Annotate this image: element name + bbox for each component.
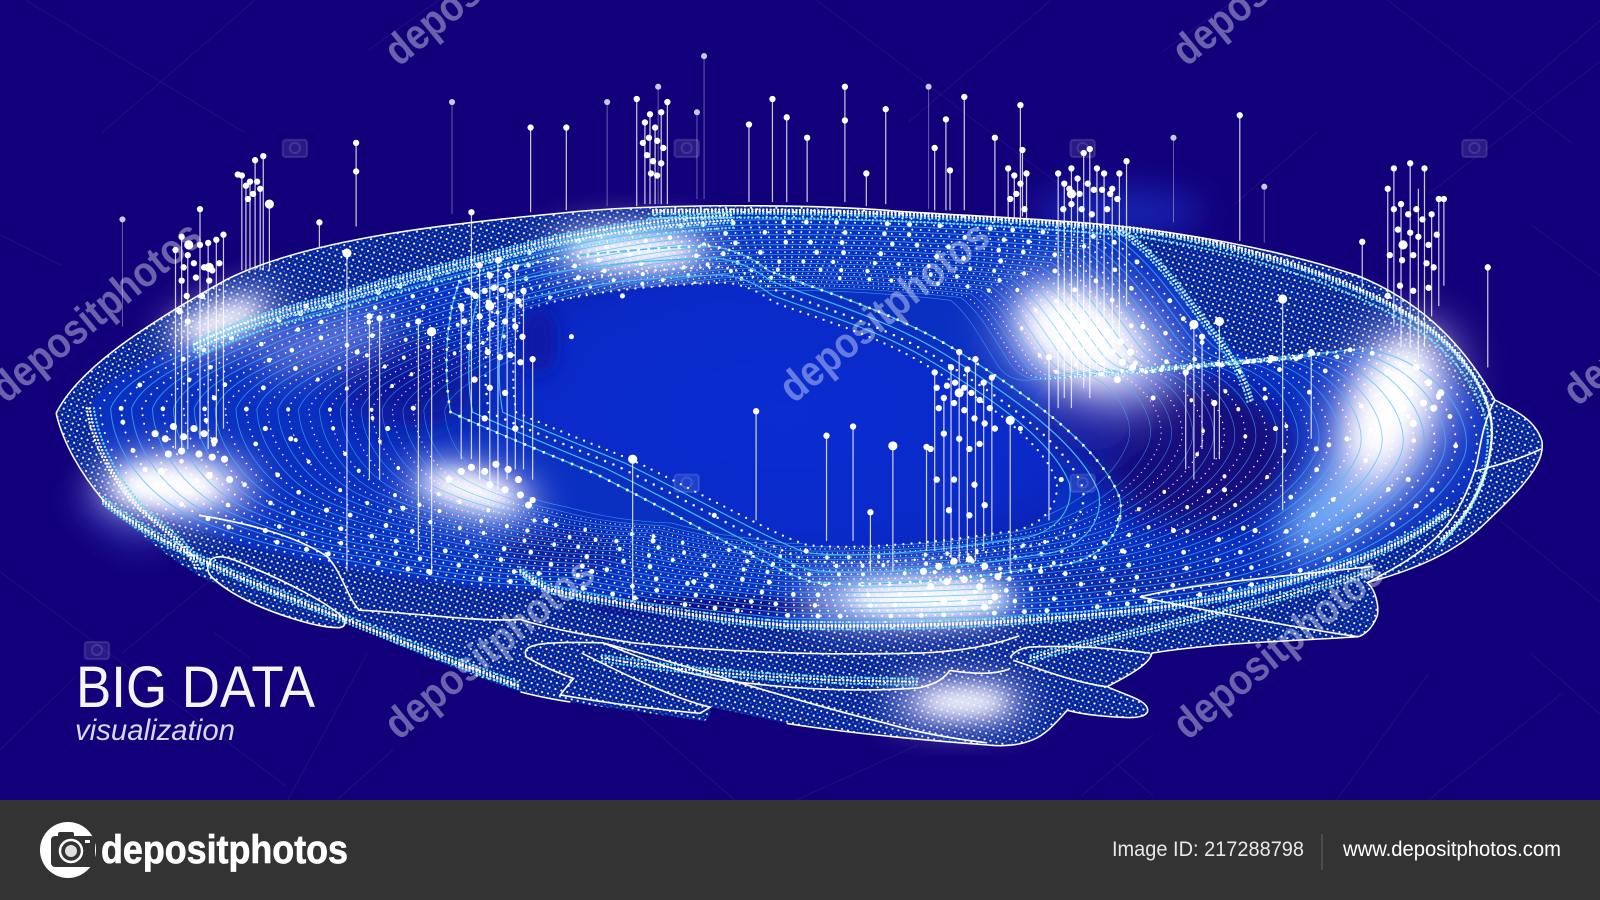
footer logo icon: camera in circle bbox=[40, 822, 96, 878]
central opening bbox=[513, 283, 1057, 547]
white outline of the silhouette bbox=[56, 206, 1542, 746]
watermark: depositphotos diagonal text: depositphotos bbox=[375, 548, 604, 749]
outer stippled silhouette bbox=[56, 206, 1542, 746]
footer bar bbox=[0, 800, 1600, 900]
contours hugging the central opening bbox=[447, 246, 1121, 584]
contour lines: cyan nested rings bbox=[111, 220, 1466, 619]
watermark: faint camera icons bbox=[85, 140, 1487, 659]
background glows around the ring bbox=[66, 190, 1204, 563]
contour lines: white dotted rings bbox=[100, 217, 1477, 622]
lower ribbons: lobes and outlines bbox=[199, 400, 1541, 743]
pin heads: small bbox=[176, 87, 1488, 515]
lavender halos around the hot-spots bbox=[96, 229, 1476, 722]
subtitle: visualization: visualization bbox=[75, 714, 235, 747]
pin heads: faint bbox=[122, 56, 1264, 219]
inner ring fill bbox=[90, 214, 1487, 625]
footer image id: Image ID: 217288798 bbox=[1112, 838, 1304, 861]
scattered bigger data points along rings bbox=[121, 222, 1456, 616]
watermark: depositphotos diagonal text: depositphotos bbox=[1164, 548, 1393, 749]
pin stems: faint bbox=[122, 56, 1264, 327]
dot clusters at the glow bases bbox=[155, 296, 1441, 607]
watermark: depositphotos diagonal text: depositphotos bbox=[770, 212, 999, 412]
shaded and lit patches of the ring bbox=[247, 300, 1422, 615]
vertical data pins bbox=[122, 56, 1488, 602]
footer website url: www.depositphotos.com bbox=[1342, 838, 1561, 861]
data ring: overall form bbox=[56, 206, 1542, 746]
pin stems: bright bbox=[176, 87, 1488, 602]
white glow hot-spots bbox=[115, 238, 1445, 712]
title: BIG DATA: BIG DATA bbox=[76, 655, 315, 720]
dark soft edge of the opening bbox=[522, 307, 555, 377]
footer logo wordmark: depositphotos bbox=[101, 828, 348, 872]
pin heads: large bbox=[189, 194, 1403, 459]
granular cyan rim of the ring bbox=[87, 209, 1492, 690]
